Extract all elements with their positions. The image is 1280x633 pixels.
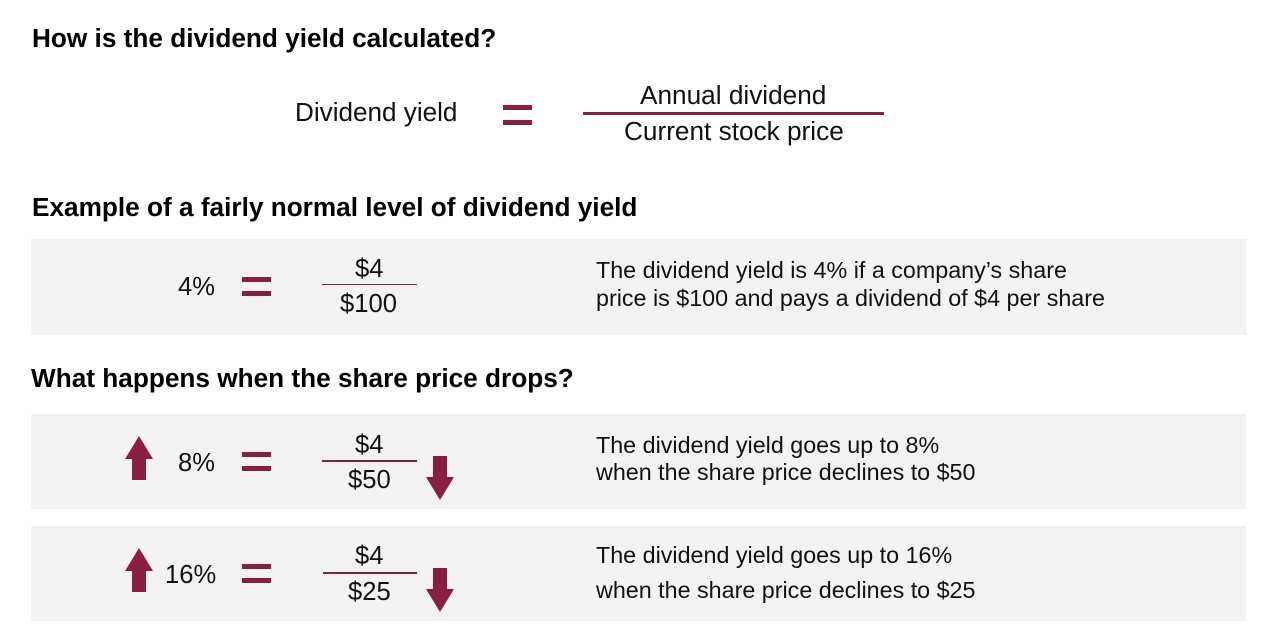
- icon: up arrow: [125, 436, 153, 480]
- heading: share price drops: What happens when the share price drops?: [31, 363, 574, 393]
- heading: normal level example: Example of a fairly normal level of dividend yield: [32, 192, 637, 222]
- denominator: $50: [348, 466, 391, 494]
- denominator: $25: [348, 578, 391, 606]
- panel: 4 percent example: [31, 239, 1246, 335]
- heading: how is the yield calculated: How is the dividend yield calculated?: [32, 23, 496, 53]
- numerator: $4: [355, 542, 383, 570]
- denominator: $100: [340, 290, 397, 318]
- icon: down arrow: [426, 568, 454, 612]
- numerator: $4: [355, 431, 383, 459]
- explanation: [596, 257, 1105, 311]
- formula denominator: Current stock price: [624, 116, 844, 146]
- equals sign: [242, 564, 271, 583]
- formula: dividend yield: [295, 80, 884, 146]
- formula label: Dividend yield: [295, 97, 457, 127]
- equals sign: [242, 452, 271, 471]
- fraction line: [322, 284, 417, 285]
- percent value: 8%: [178, 449, 215, 477]
- formula equals sign: [503, 105, 532, 125]
- explanation: price is $100 and pays a dividend of $4 per share: [596, 285, 1105, 311]
- percent value: 4%: [178, 273, 215, 301]
- explanation: when the share price declines to $25: [596, 577, 975, 603]
- numerator: $4: [355, 255, 383, 283]
- explanation: The dividend yield goes up to 8%: [596, 432, 939, 458]
- explanation: The dividend yield goes up to 16%: [596, 542, 952, 568]
- explanation: The dividend yield is 4% if a company’s share: [596, 257, 1067, 283]
- fraction line: [322, 460, 417, 462]
- explanation: when the share price declines to $50: [596, 459, 975, 485]
- explanation: [596, 432, 975, 485]
- icon: up arrow: [125, 548, 153, 592]
- formula numerator: Annual dividend: [640, 80, 826, 110]
- percent value: 16%: [165, 561, 216, 589]
- panel: 8 percent example: [31, 414, 1246, 509]
- explanation: [596, 542, 975, 603]
- icon: down arrow: [426, 456, 454, 500]
- panel: 16 percent example: [31, 526, 1246, 621]
- formula fraction line: [583, 112, 884, 115]
- equals sign: [242, 277, 271, 296]
- fraction line: [323, 572, 417, 574]
